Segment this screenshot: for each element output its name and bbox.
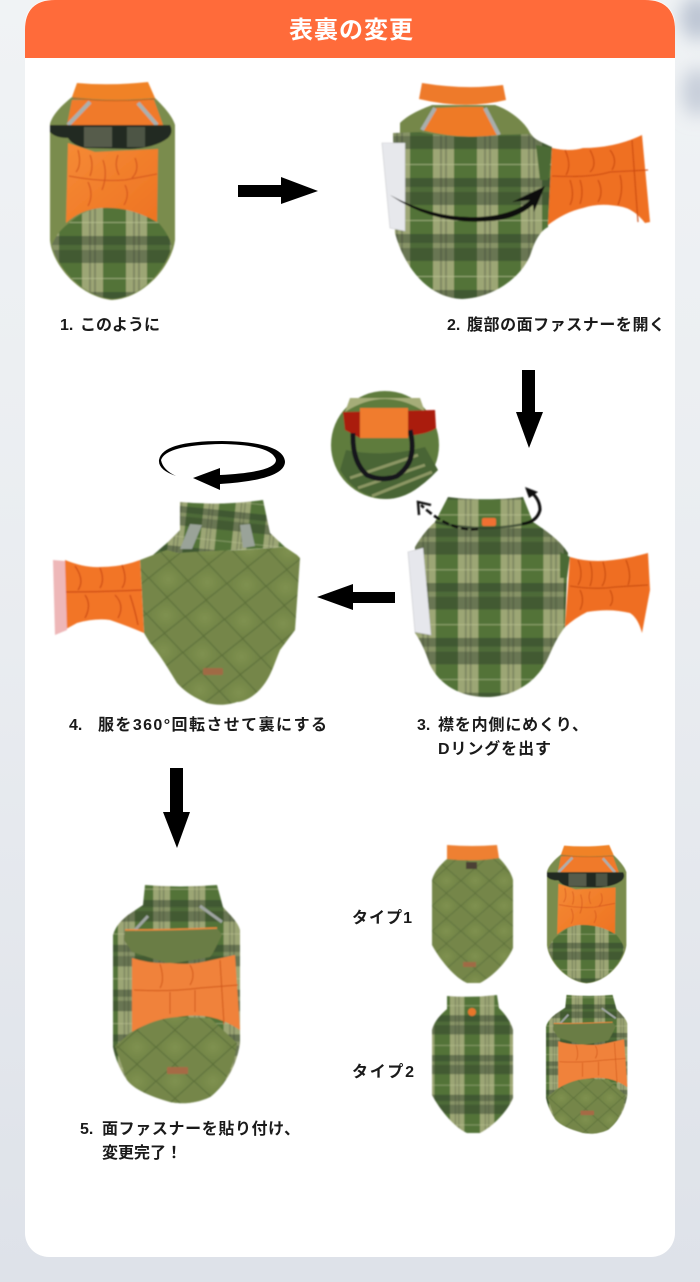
- caption: step 3: [417, 716, 588, 758]
- garment: step 2: [382, 83, 650, 299]
- title: 表裏の変更: [289, 16, 413, 44]
- caption: step 5: 5.: [80, 1121, 93, 1138]
- arrow: black curved: [390, 186, 545, 222]
- garment: step 3: [408, 487, 650, 697]
- caption: step 3: 襟を内側にめくり、: [438, 716, 588, 734]
- garment: step 1: [50, 82, 175, 300]
- label: type 1: タイプ1: [352, 909, 412, 927]
- arrow: dashed collar fold: [421, 505, 478, 529]
- arrow: rotation: [159, 441, 285, 490]
- icon: D-ring detail circle: [331, 391, 439, 499]
- caption: step 1: 1.: [60, 317, 73, 334]
- caption: step 5: 面ファスナーを貼り付け、: [102, 1119, 300, 1138]
- caption: step 1: このように: [80, 316, 160, 334]
- garment: step 4: [53, 500, 300, 705]
- garment: type 2 front: [432, 995, 513, 1133]
- arrow: dashed arrowhead: [418, 502, 431, 515]
- caption: step 4: 服を360°回転させて裏にする: [98, 715, 327, 734]
- caption: step 2: 腹部の面ファスナーを開く: [467, 315, 665, 334]
- caption: step 2: 2.: [447, 317, 460, 334]
- caption: step 5: [80, 1119, 300, 1162]
- arrow: step 4 to 5: [163, 768, 190, 848]
- arrow: solid collar fold: [522, 493, 540, 524]
- arrow: solid arrowhead: [525, 487, 538, 498]
- arrow: step 2 to 3: [516, 370, 543, 448]
- caption: step 3: 3.: [417, 717, 430, 734]
- arrow: step 3 to 4: [317, 584, 395, 610]
- caption: step 4: 4.: [69, 717, 82, 734]
- arrow: step 1 to 2: [238, 177, 318, 204]
- garment: type 2 back: [546, 995, 627, 1134]
- header bar: [25, 0, 675, 58]
- garment: step 5: [113, 885, 240, 1103]
- garment: type 1 front: [432, 845, 513, 983]
- caption: step 3: Dリングを出す: [438, 739, 551, 758]
- garment: type 1 back: [547, 845, 626, 983]
- label: type 2: タイプ2: [352, 1063, 414, 1081]
- caption: step 5: 変更完了！: [102, 1143, 182, 1162]
